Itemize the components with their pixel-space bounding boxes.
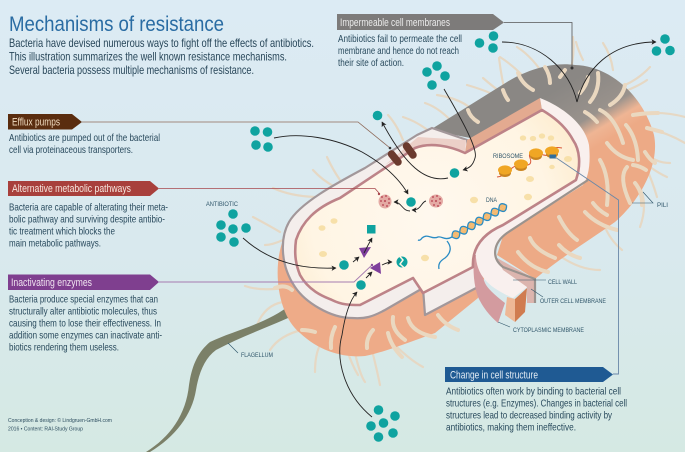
metabolic bypass arrows bbox=[394, 201, 426, 211]
inactivated antibiotic: broken circle bbox=[396, 256, 408, 268]
cross-section: right white wall bbox=[476, 98, 590, 298]
label dots bbox=[371, 66, 574, 266]
enzyme blob: left bbox=[378, 194, 392, 208]
DNA double helix bbox=[418, 204, 507, 269]
label line: change in cell structure bbox=[555, 157, 618, 374]
ribosomes on mRNA bbox=[497, 146, 562, 177]
antibiotic group: left bbox=[216, 209, 251, 247]
heading: efflux pumps bbox=[8, 114, 82, 130]
text: inactivating enzymes: biotics rendering them useless. bbox=[9, 342, 119, 354]
pale storage granules bbox=[318, 133, 572, 261]
text: inactivating enzymes: addition some enzymes can inactivate anti- bbox=[9, 330, 162, 342]
heading: alternative metabolic pathways: Alternative metabolic pathways bbox=[12, 183, 131, 195]
part label: flagellum bbox=[228, 343, 273, 359]
text: change in cell structure: Antibiotics often work by binding to bacterial cell bbox=[446, 386, 621, 398]
intro text: Bacteria have devised numerous ways to fight off the effects of antibiotics. bbox=[9, 36, 314, 50]
text: inactivating enzymes: structurally alter antibiotic molecules, thus bbox=[9, 306, 157, 318]
part label: ribosome: RIBOSOME bbox=[493, 153, 524, 160]
label line: alternative metabolic pathways bbox=[159, 188, 379, 193]
text: efflux pumps bbox=[9, 133, 160, 156]
inactivated product: teal square bbox=[367, 225, 376, 234]
cross-section: upper peach band bbox=[465, 98, 542, 153]
text: alternative metabolic pathways bbox=[9, 202, 168, 250]
cell body: left peach end bbox=[278, 200, 490, 356]
cytoplasmic membrane flap bbox=[474, 255, 505, 323]
intro text: Several bacteria possess multiple mechanisms of resistance. bbox=[9, 63, 254, 77]
text: impermeable cell membranes: their site of action. bbox=[338, 58, 404, 69]
credits: 2016 • Content: RAI-Study Group bbox=[8, 426, 83, 432]
antibiotic group: bottom bbox=[366, 405, 400, 442]
purple enzyme: lower bbox=[370, 262, 381, 274]
antibiotic group: upper bbox=[422, 61, 450, 90]
text: alternative metabolic pathways: tic treatment which blocks the bbox=[9, 226, 115, 238]
part label: cytoplasmic membrane bbox=[498, 322, 584, 334]
part label: pili: PILI bbox=[657, 202, 668, 209]
purple enzyme: upper bbox=[359, 247, 371, 258]
heading: efflux pumps: Efflux pumps bbox=[12, 116, 60, 128]
text: efflux pumps: cell via proteinaceous transporters. bbox=[9, 145, 133, 156]
cytoplasm with cytoplasmic membrane bbox=[295, 110, 579, 305]
pili outside the cell bbox=[245, 37, 685, 385]
intro text bbox=[9, 36, 314, 77]
title: Mechanisms of resistance bbox=[9, 12, 224, 36]
text: change in cell structure: structures (e.g. Enzymes). Changes in bacterial cell bbox=[446, 398, 627, 410]
part label: antibiotic: ANTIBIOTIC bbox=[206, 201, 238, 208]
part label: cell wall bbox=[513, 279, 577, 286]
enzyme blob: right bbox=[429, 194, 443, 208]
text: efflux pumps: Antibiotics are pumped out of the bacterial bbox=[9, 133, 160, 144]
part label: flagellum: FLAGELLUM bbox=[241, 352, 273, 359]
antibiotic group: impermeable left bbox=[475, 31, 498, 53]
cross-section: pink upper wall band bbox=[385, 137, 466, 165]
text: change in cell structure: structures lead to decreased binding activity by bbox=[446, 410, 613, 422]
text: impermeable cell membranes: Antibiotics fail to permeate the cell bbox=[338, 34, 462, 45]
part label: outer cell membrane: OUTER CELL MEMBRANE bbox=[540, 298, 606, 305]
text: inactivating enzymes bbox=[9, 294, 162, 354]
wall gray edge bbox=[495, 180, 588, 303]
text: impermeable cell membranes bbox=[338, 34, 462, 69]
part label: pili bbox=[632, 192, 668, 209]
part label: cytoplasmic membrane: CYTOPLASMIC MEMBRANE bbox=[513, 327, 584, 334]
text: alternative metabolic pathways: main metabolic pathways. bbox=[9, 238, 101, 250]
intro text: This illustration summarizes the well known resistance mechanisms. bbox=[9, 50, 287, 64]
pili on the cell surface bbox=[275, 67, 662, 357]
antibiotic group: impermeable right bbox=[652, 34, 675, 56]
heading: inactivating enzymes bbox=[8, 274, 159, 290]
cell body: right outer surface bbox=[430, 64, 655, 279]
heading: impermeable cell membranes bbox=[337, 14, 504, 30]
flagellum bbox=[146, 303, 301, 452]
label line: impermeable membranes bbox=[504, 22, 572, 68]
heading: impermeable cell membranes: Impermeable cell membranes bbox=[340, 17, 450, 29]
credits: Conception & design: © Lindgruen-GmbH.com bbox=[8, 417, 112, 424]
outer cell membrane corner bbox=[497, 258, 535, 303]
heading: inactivating enzymes: Inactivating enzymes bbox=[11, 277, 92, 289]
text: impermeable cell membranes: membrane and hence do not reach bbox=[338, 46, 459, 57]
heading: change in cell structure: Change in cell structure bbox=[450, 370, 538, 382]
heading: change in cell structure bbox=[445, 367, 613, 382]
cut wall block bbox=[505, 288, 527, 322]
text: inactivating enzymes: causing them to lose their effectiveness. In bbox=[9, 318, 161, 330]
part label: outer cell membrane bbox=[531, 289, 606, 305]
antibiotic group: efflux bbox=[250, 126, 273, 152]
text: alternative metabolic pathways: bolic pathway and surviving despite antibio- bbox=[9, 214, 165, 226]
part label: cell wall: CELL WALL bbox=[548, 279, 577, 286]
text: change in cell structure bbox=[446, 386, 627, 434]
arrows: antibiotic paths bbox=[243, 42, 656, 417]
label line: efflux pumps bbox=[82, 122, 390, 148]
text: alternative metabolic pathways: Bacteria are capable of alterating their meta- bbox=[9, 202, 168, 214]
efflux pump proteins bbox=[392, 146, 413, 162]
part label: DNA: DNA bbox=[486, 197, 497, 204]
text: change in cell structure: antibiotics, making them ineffective. bbox=[446, 422, 576, 434]
single antibiotics in and around the cell bbox=[339, 111, 459, 290]
text: inactivating enzymes: Bacteria produce special enzymes that can bbox=[9, 294, 158, 306]
credits bbox=[8, 417, 112, 432]
cross-section: cell wall outer line and white face bbox=[283, 128, 480, 318]
label line: inactivating enzymes bbox=[159, 265, 372, 282]
